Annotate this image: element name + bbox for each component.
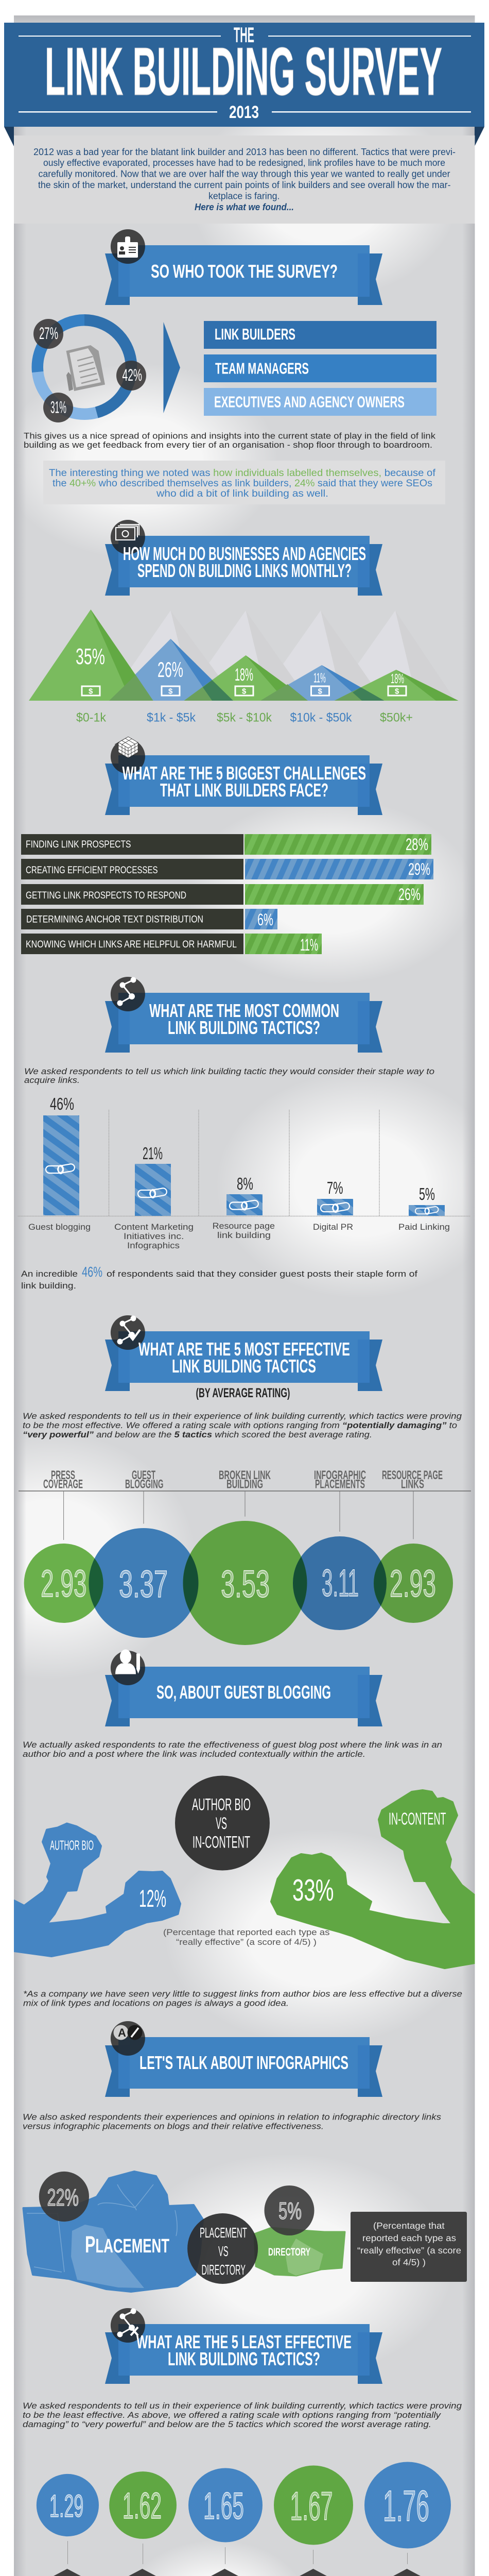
column labels: COVERAGE: [43, 1478, 83, 1492]
text: incredible 46 percent: 46%: [82, 1264, 102, 1280]
icon: nodes with cross: [117, 2309, 138, 2337]
column labels: PLACEMENTS: [315, 1478, 365, 1492]
icon: share nodes: [117, 977, 136, 1006]
callout: labelling note: The interesting thing we noted was how individuals labelled themselves, because of: [49, 468, 436, 479]
bar chart: challenges: GETTING LINK PROSPECTS TO RESPOND: [26, 890, 186, 901]
text: least effective intro: We asked respondents to tell us in their experience of link building currently, which tactics were proving: [23, 2401, 462, 2411]
section heading: common tactics: [105, 977, 382, 1053]
labels: Content Marketing: [114, 1222, 194, 1232]
labels: Guest blogging: [28, 1222, 91, 1232]
text: effective intro: to be the most effective. We offered a rating scale with options ranging from “potentially damaging” to: [23, 1421, 457, 1430]
note box: reported each type as: [362, 2233, 456, 2243]
text: infographic intro: We also asked respondents their experiences and opinions in relation to infographic directory links: [23, 2113, 441, 2122]
donut chart: survey roles: 27%: [39, 324, 58, 343]
values: [41, 1562, 436, 1605]
icon: text and brush: [113, 2025, 142, 2040]
labels: $1k - $5k: [147, 711, 196, 725]
section heading: least effective: LINK BUILDING TACTICS?: [168, 2348, 320, 2369]
text: common tactics intro: [24, 1067, 434, 1085]
column labels: RESOURCE PAGE: [382, 1468, 443, 1482]
chart: placement vs directory: PLACEMENT: [85, 2231, 169, 2258]
donut chart: survey roles: 42%: [123, 366, 142, 384]
text: incredible 46 percent: link building.: [21, 1281, 76, 1291]
values: 3.53: [221, 1563, 270, 1605]
section heading: biggest challenges: THAT LINK BUILDERS FACE?: [160, 779, 328, 801]
chart: spend mountains: 18%: [391, 671, 404, 686]
versus oval: VS: [218, 2243, 229, 2259]
text: company footnote: [23, 1990, 462, 2008]
intro text panel: Here is what we found...: [195, 202, 294, 212]
section heading: most effective: [105, 1315, 382, 1391]
text: company footnote: mix of link types and locations on pages is always a good idea.: [23, 1999, 289, 2008]
chart: placement vs directory: DIRECTORY: [268, 2246, 310, 2258]
icons: chain links: [46, 1163, 439, 1214]
panel: author bio vs in-content: AUTHOR BIO: [50, 1837, 94, 1853]
labels: link building: [217, 1230, 271, 1240]
bar chart: challenges: CREATING EFFICIENT PROCESSES: [26, 865, 158, 876]
column labels: INFOGRAPHIC: [314, 1468, 366, 1482]
intro text panel: 2012 was a bad year for the blatant link builder and 2013 has been no different. Tactics that were previ-: [33, 147, 456, 157]
text: guest blogging intro: We actually asked respondents to rate the effectiveness of guest blog post where the link was in an: [23, 1740, 442, 1750]
intro text panel: [14, 135, 475, 224]
graphic: blue arms: [14, 1824, 180, 1956]
values: 1.29: [49, 2488, 83, 2523]
bar chart: challenges: DETERMINING ANCHOR TEXT DISTRIBUTION: [26, 914, 203, 925]
note box: “really effective” (a score: [357, 2245, 461, 2256]
text: spread of opinions: building as we get feedback from every tier of an organisation - shop floor through to boardroom.: [24, 440, 432, 450]
icon: text and brush: A: [118, 2026, 126, 2039]
intro text panel: ously effective evaporated, processes have had to be redesigned, link profiles have to be much more: [43, 158, 445, 168]
bar chart: challenges: 6%: [257, 910, 273, 929]
heading text: WHAT ARE THE 5 LEAST EFFECTIVE: [136, 2331, 352, 2352]
column labels: LINKS: [401, 1478, 424, 1492]
note: (Percentage that reported each type as: [163, 1927, 329, 1937]
legend: roles: [204, 321, 436, 416]
column labels: BLOGGING: [125, 1478, 164, 1492]
labels: Resource page: [213, 1221, 275, 1231]
bar chart: challenges: [21, 834, 433, 954]
arrow: pointer to legend: [164, 322, 180, 413]
bar chart: challenges: FINDING LINK PROSPECTS: [26, 839, 131, 850]
chart: spend mountains: $: [168, 687, 173, 696]
text: guest blogging intro: [23, 1740, 442, 1759]
chart: placement vs directory: 5%: [278, 2197, 302, 2224]
values: 2.93: [390, 1562, 436, 1605]
column labels: GUEST: [132, 1468, 155, 1482]
panel: author bio vs in-content: 12%: [139, 1885, 166, 1912]
heading: year: 2013: [229, 103, 259, 122]
bar chart: challenges: 29%: [408, 860, 430, 878]
graphic: green arms: [271, 1790, 475, 1968]
bar chart: challenges: 28%: [406, 835, 428, 854]
note box: (Percentage that: [373, 2221, 445, 2231]
icon: id badge: [117, 236, 138, 258]
values: 3.37: [119, 1563, 168, 1605]
text: least effective intro: damaging” to “very powerful” and below are the 5 tactics which scored the worst average rating.: [23, 2420, 431, 2429]
text: common tactics intro: acquire links.: [24, 1076, 80, 1085]
labels: Infographics: [127, 1241, 180, 1250]
chart: spend mountains: $: [242, 687, 247, 696]
section heading: so who took the survey: [105, 229, 382, 305]
chart: placement vs directory: 22%: [47, 2184, 79, 2211]
intro text panel: ketplace is faring.: [208, 191, 280, 201]
chart: spend mountains: $: [89, 687, 93, 696]
labels: $0-1k: [76, 711, 107, 725]
icon: banknotes: [116, 524, 139, 540]
heading text: WHAT ARE THE 5 MOST EFFECTIVE: [138, 1338, 350, 1360]
icon: nodes with tick: [117, 1316, 140, 1344]
values: 35%: [76, 644, 105, 669]
text: company footnote: *As a company we have seen very little to suggest links from author bios are less effective but a diverse: [23, 1990, 462, 1999]
heading text: WHAT ARE THE MOST COMMON: [149, 1000, 339, 1021]
section heading: least effective: [105, 2308, 382, 2384]
bar chart: challenges: 11%: [300, 936, 318, 954]
text: incredible 46 percent: of respondents said that they consider guest posts their staple form of: [107, 1269, 417, 1279]
labels: Initiatives inc.: [124, 1231, 184, 1241]
chart: placement vs directory: [24, 2172, 467, 2292]
values: 7%: [327, 1178, 343, 1197]
section heading: common tactics: LINK BUILDING TACTICS?: [168, 1017, 320, 1038]
text: guest blogging intro: author bio and a post where the link was included contextually within the article.: [23, 1750, 365, 1759]
labels: $5k - $10k: [217, 711, 272, 725]
section heading: guest blogging: [105, 1650, 382, 1726]
circles: [24, 1544, 103, 1623]
versus oval: [187, 2213, 258, 2284]
labels: [76, 711, 413, 725]
heading text: SO, ABOUT GUEST BLOGGING: [156, 1682, 331, 1703]
chart: spend mountains: 11%: [313, 670, 326, 685]
values: 2.93: [41, 1562, 86, 1605]
graphic: green armchair: [254, 2228, 345, 2276]
panel: author bio vs in-content: 33%: [292, 1873, 334, 1907]
heading text: LET'S TALK ABOUT INFOGRAPHICS: [139, 2052, 348, 2073]
section heading: biggest challenges: [105, 737, 382, 815]
header banner: [4, 23, 484, 146]
column labels: BUILDING: [226, 1478, 263, 1492]
graphic: blue armchair: [24, 2172, 203, 2292]
labels: Digital PR: [313, 1222, 353, 1232]
text: infographic intro: [23, 2113, 441, 2131]
text: effective intro: [23, 1412, 462, 1439]
text: least effective intro: [23, 2401, 462, 2429]
legend: roles: TEAM MANAGERS: [215, 360, 309, 377]
text: effective intro: “very powerful” and below are the 5 tactics which scored the best average rating.: [23, 1430, 372, 1439]
intro text panel: carefully monitored. Now that we are over half the way through this year we wanted to really get under: [38, 169, 450, 179]
hexagons: [46, 2569, 428, 2576]
chart: least effective tactics: [37, 2462, 451, 2576]
icon: author with pen: [115, 1650, 140, 1674]
circles: [37, 2474, 99, 2536]
labels: [28, 1221, 450, 1250]
donut chart: survey roles: [33, 319, 146, 422]
labels: Paid Linking: [398, 1222, 450, 1232]
note box: [351, 2212, 467, 2282]
callout: labelling note: the 40+% who described themselves as link builders, 24% said that they were SEOs: [53, 478, 432, 489]
text: common tactics intro: We asked respondents to tell us which link building tactic they would consider their staple way to: [24, 1067, 434, 1076]
versus oval: DIRECTORY: [202, 2262, 246, 2278]
chart: least effective tactics: 1.76: [383, 2482, 429, 2530]
values: 21%: [143, 1144, 163, 1163]
chart: spend mountains: $: [318, 687, 322, 696]
chart: least effective tactics: 1.62: [123, 2486, 162, 2527]
note: [163, 1927, 329, 1947]
values: 8%: [237, 1174, 253, 1193]
chart: spend mountains: 18%: [235, 665, 253, 685]
column labels: PRESS: [51, 1468, 75, 1482]
callout: labelling note: who did a bit of link building as well.: [156, 488, 328, 499]
chart: least effective tactics: 1.65: [203, 2485, 244, 2527]
versus oval: VS: [216, 1814, 227, 1833]
text: incredible 46 percent: An incredible: [21, 1269, 78, 1279]
versus oval: IN-CONTENT: [193, 1833, 250, 1852]
heading text: WHAT ARE THE 5 BIGGEST CHALLENGES: [123, 762, 366, 784]
section heading: monthly spend: [105, 520, 382, 596]
note box: of 4/5) ): [392, 2257, 426, 2267]
bar chart: challenges: KNOWING WHICH LINKS ARE HELPFUL OR HARMFUL: [26, 939, 237, 950]
labels: $10k - $50k: [290, 711, 352, 725]
chart: spend mountains: 26%: [158, 657, 183, 682]
text: infographic intro: versus infographic placements on blogs and their relative effectiveness.: [23, 2122, 324, 2131]
versus oval: [175, 1775, 270, 1870]
values: 3.11: [322, 1562, 359, 1604]
icons: banknotes: [82, 686, 406, 696]
text: spread of opinions: This gives us a nice spread of opinions and insights into the current state of play in the field of link: [24, 431, 436, 440]
chart: spend mountains: $: [395, 687, 399, 696]
chart: least effective tactics: 1.67: [290, 2483, 333, 2529]
subheading: by average rating: (BY AVERAGE RATING): [196, 1386, 290, 1400]
icon: document and pencil: [66, 345, 105, 391]
intro text panel: the skin of the market, understand the current pain points of link builders and see overall how the mar-: [38, 180, 451, 190]
text: spread of opinions: [24, 431, 436, 450]
values: 46%: [50, 1094, 74, 1113]
values: [50, 1094, 435, 1204]
bar chart: challenges: 26%: [398, 885, 421, 904]
versus oval: PLACEMENT: [200, 2225, 247, 2241]
donut chart: survey roles: 31%: [50, 398, 66, 416]
chart: most effective tactics: [19, 1468, 471, 1645]
chart: spend mountains: [29, 609, 458, 725]
icon: cube: [115, 737, 138, 758]
legend: roles: LINK BUILDERS: [215, 325, 295, 343]
heading text: SO WHO TOOK THE SURVEY?: [151, 261, 338, 282]
section heading: monthly spend: SPEND ON BUILDING LINKS MONTHLY?: [137, 560, 352, 581]
versus oval: AUTHOR BIO: [192, 1795, 251, 1814]
column labels: BROKEN LINK: [219, 1468, 271, 1482]
text: effective intro: We asked respondents to tell us in their experience of link building currently, which tactics were proving: [23, 1412, 462, 1421]
text: incredible 46 percent: [21, 1264, 417, 1291]
text: least effective intro: to be the least effective. As above, we offered a rating scale with options ranging from “potentially: [23, 2411, 442, 2420]
panel: author bio vs in-content: [14, 1775, 475, 1968]
labels: $50k+: [380, 711, 413, 725]
column labels: [43, 1468, 443, 1492]
values: 5%: [419, 1184, 435, 1204]
bar chart: common tactics: [18, 1094, 470, 1250]
section heading: infographics: [105, 2021, 382, 2097]
header banner: THE: [234, 23, 254, 47]
callout: labelling note: [43, 461, 445, 504]
section heading: most effective: LINK BUILDING TACTICS: [172, 1355, 316, 1377]
note: “really effective” (a score of 4/5) ): [176, 1937, 317, 1947]
